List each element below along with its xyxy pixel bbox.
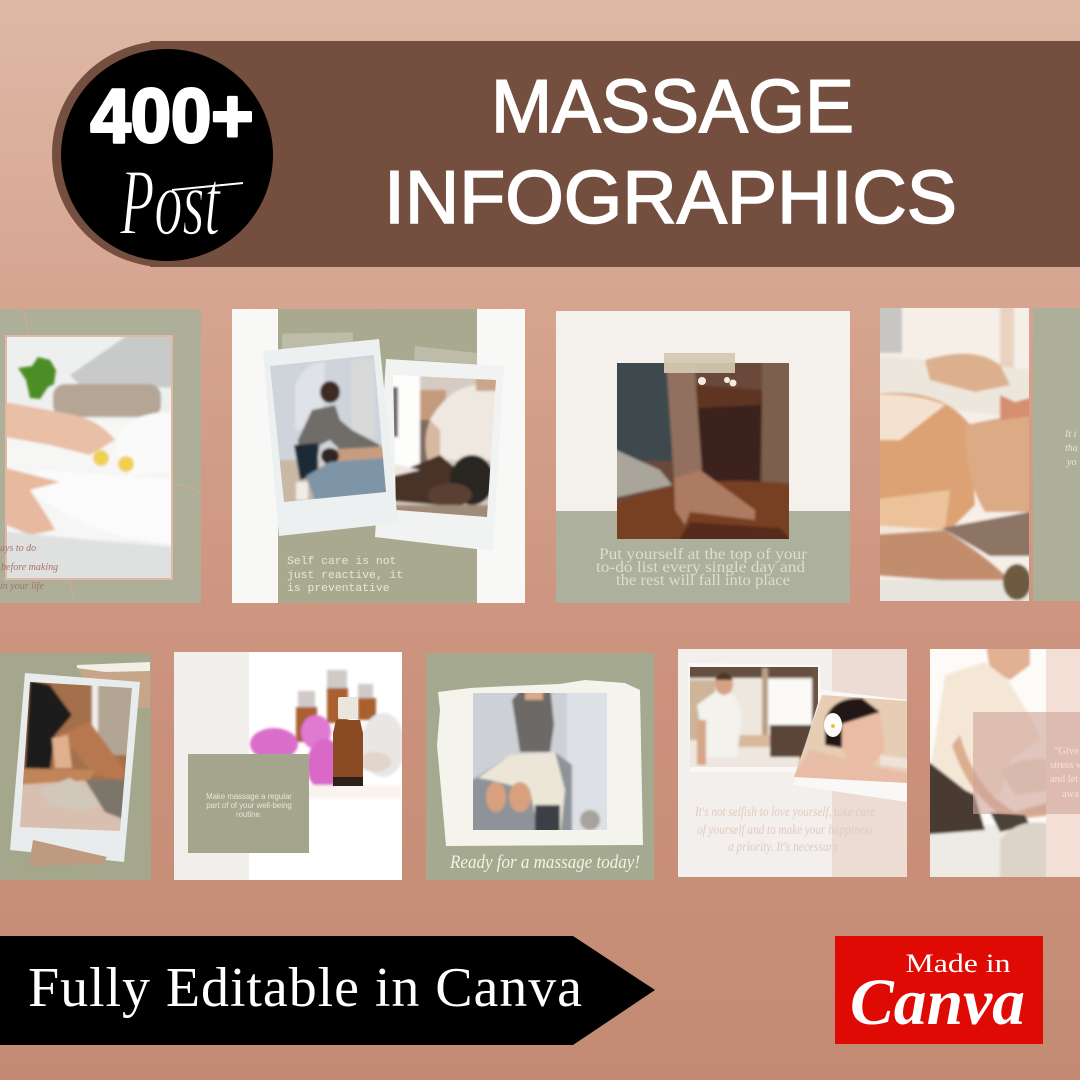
title: MASSAGE [491,64,854,148]
header banner [52,41,1080,267]
caption: is preventative [287,583,390,595]
photo: foot massage [20,682,132,831]
callout [188,754,309,853]
panel: therapist with towel [930,649,1080,877]
caption: Put yourself at the top of your [599,546,808,563]
panel: not selfish [678,649,917,877]
caption: yo [1066,457,1076,468]
polaroid: therapist [688,663,820,772]
panel: top of your list [556,311,850,603]
caption: It i [1064,429,1077,440]
caption [1064,429,1078,468]
badge: 400+ Post: 400+ [90,74,254,159]
photo: hand on back [617,363,789,539]
caption: It's not selfish to love yourself, take care [694,805,875,820]
photo: spa terrace [690,667,818,767]
badge: made in canva: Canva [850,966,1025,1039]
torn paper [437,680,643,846]
arrow banner: fully editable [0,936,655,1045]
callout: awa [1062,789,1079,800]
caption: in your life [0,581,44,592]
caption [694,805,875,855]
caption: Ready for a massage today! [449,852,640,873]
photo: smiling client [880,308,1029,601]
caption: a priority. It's necessary [728,840,839,855]
callout: part of of your well-being [206,801,292,810]
photo: shoulder massage [393,375,496,517]
callout [973,712,1080,814]
polaroid: therapist and client [375,359,496,550]
caption: of yourself and to make your happiness [697,823,873,838]
title [384,64,957,239]
photo: massage from above [473,693,607,830]
photo: back massage in white room [270,355,386,502]
callout: Make massage a regular [206,792,292,801]
caption: just reactive, it [287,570,403,582]
panel: towel and flowers [0,309,201,603]
caption [0,543,58,592]
callout: routine. [236,810,262,819]
arrow banner: fully editable: Fully Editable in Canva [28,957,582,1019]
badge: made in canva [835,936,1043,1044]
caption: ays to do [0,543,36,554]
caption [596,546,808,589]
panel: self care polaroids [232,309,525,603]
caption [287,556,403,595]
caption: the rest will fall into place [616,572,790,589]
badge: made in canva: Made in [906,949,1010,978]
badge: 400+ Post: Post [119,151,221,255]
photo: woman with flower [794,695,907,783]
panel: foot massage polaroid [0,653,151,880]
panel: ready for a massage [426,653,654,880]
callout: and let [1050,774,1078,785]
caption: to-do list every single day and [596,559,805,576]
photo: hands with towel [7,337,171,578]
photo: oil bottles and flowers [248,668,402,799]
title: INFOGRAPHICS [384,155,957,239]
photo: therapist [930,649,1046,877]
panel: essential oils [174,652,405,880]
polaroid frame [10,673,140,862]
caption: before making [1,562,58,573]
badge: 400+ Post [61,49,273,261]
caption: tha [1065,443,1078,454]
polaroid: woman with flower [794,690,907,802]
panel: spa client relaxing [880,308,1080,601]
caption: Self care is not [287,556,396,568]
polaroid: back massage [255,339,400,536]
